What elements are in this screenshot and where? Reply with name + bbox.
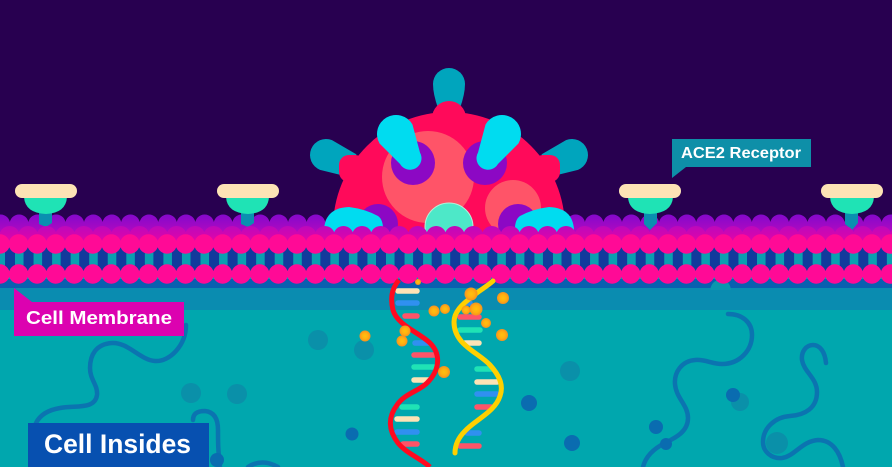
virus: bright cyan spikes xyxy=(324,108,574,234)
label: Cell Membrane: Cell Membrane xyxy=(26,308,172,328)
receptor 2 xyxy=(217,184,279,227)
virus: purple receptor spots xyxy=(364,141,532,232)
label: Cell Insides: Cell Insides xyxy=(44,429,191,459)
receptor 3 xyxy=(619,184,681,230)
label: ACE2 Receptor: ACE2 Receptor xyxy=(681,145,801,162)
membrane: upper purple lipid row xyxy=(0,214,892,234)
virus: body xyxy=(334,101,564,232)
orange particles xyxy=(360,279,509,378)
label: ACE2 Receptor xyxy=(672,139,811,178)
cell interior xyxy=(0,250,892,467)
label: Cell Insides xyxy=(28,423,209,467)
virus: inner light circles xyxy=(382,131,541,236)
virus particle xyxy=(310,68,588,232)
virus: seafoam dome xyxy=(424,202,474,232)
virus: outer dark spikes xyxy=(305,68,593,180)
viral RNA: red strand xyxy=(390,280,438,467)
receptor 4 xyxy=(821,184,883,230)
ACE2 receptors xyxy=(15,184,883,230)
label: Cell Membrane xyxy=(14,288,184,336)
membrane: lipid layers xyxy=(0,236,892,274)
receptor 1 xyxy=(15,184,77,227)
cell insides: squiggles and particles xyxy=(36,314,843,467)
viral RNA: yellow strand xyxy=(454,281,501,453)
